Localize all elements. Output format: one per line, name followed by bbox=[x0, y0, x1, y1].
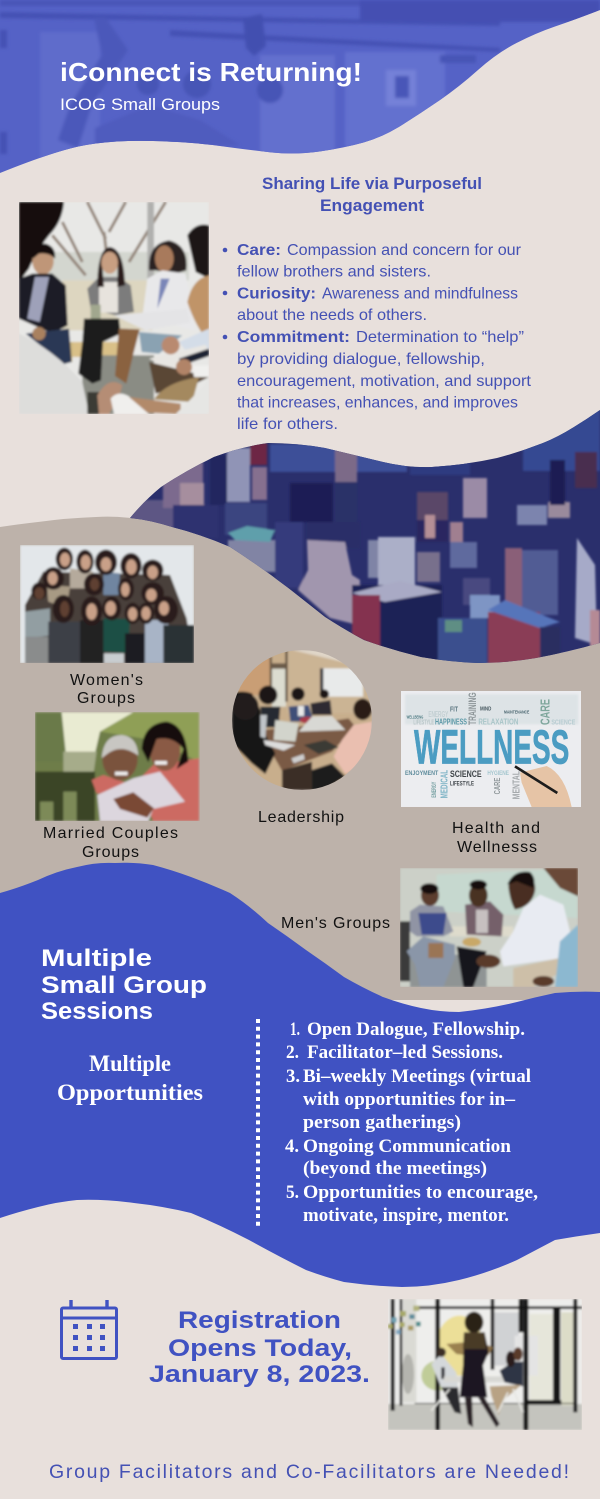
text block: care, curiosity, commitment bullets: Determination to “help” bbox=[356, 329, 524, 346]
text: registration date: Registration bbox=[178, 1307, 341, 1334]
photo: wellness word cloud: TRAINING bbox=[467, 692, 479, 725]
label: women's groups: Groups bbox=[77, 690, 135, 707]
text: registration date: Opens Today, bbox=[168, 1335, 352, 1362]
photo: wellness word cloud: MENTAL bbox=[511, 771, 522, 799]
heading: multiple small group sessions: Sessions bbox=[41, 998, 153, 1025]
photo: wellness word cloud: FIT bbox=[450, 705, 458, 714]
photo: wellness word cloud: CARE bbox=[537, 699, 552, 725]
photo: wellness word cloud bbox=[400, 691, 582, 807]
photo: wellness word cloud: MEDICAL bbox=[439, 770, 450, 798]
photo: wellness word cloud: ENERGY bbox=[432, 782, 438, 798]
label: men's groups: Men's Groups bbox=[281, 915, 390, 932]
numbered list: 5. bbox=[286, 1182, 299, 1203]
numbered list: 4. bbox=[285, 1136, 299, 1157]
label: married couples groups: Groups bbox=[82, 844, 139, 861]
photo: wellness word cloud: RELAXATION bbox=[478, 716, 518, 726]
photo: women's group bbox=[20, 545, 194, 663]
text block: care, curiosity, commitment bullets: Commitment: bbox=[237, 329, 350, 346]
heading: sharing life: Engagement bbox=[320, 197, 425, 215]
label: women's groups bbox=[70, 672, 143, 707]
heading: sharing life: Sharing Life via Purposeful bbox=[262, 175, 482, 193]
numbered list: (beyond the meetings) bbox=[303, 1158, 487, 1179]
text block: care, curiosity, commitment bullets: encouragement, motivation, and support bbox=[237, 373, 532, 390]
label: married couples groups: Married Couples bbox=[43, 825, 178, 842]
photo: wellness word cloud: SCIENCE bbox=[551, 717, 575, 726]
label: married couples groups bbox=[43, 825, 178, 861]
dotted divider bbox=[256, 1019, 260, 1226]
numbered list: motivate, inspire, mentor. bbox=[303, 1205, 509, 1226]
photo: city skyline bbox=[130, 400, 600, 670]
photo: wellness word cloud: WELLBEING bbox=[407, 714, 424, 719]
text block: care, curiosity, commitment bullets: by providing dialogue, fellowship, bbox=[237, 351, 485, 368]
icon: calendar bbox=[60, 1300, 118, 1358]
text block: care, curiosity, commitment bullets: about the needs of others. bbox=[237, 307, 427, 324]
label: health and wellness bbox=[452, 820, 540, 856]
subtitle: ICOG Small Groups bbox=[60, 95, 220, 114]
text block: care, curiosity, commitment bullets: Compassion and concern for our bbox=[287, 242, 522, 259]
photo: wellness word cloud: LIFESTYLE bbox=[450, 781, 474, 788]
label: leadership: Leadership bbox=[258, 809, 344, 826]
text: registration date: January 8, 2023. bbox=[149, 1361, 370, 1388]
numbered list: Facilitator–led Sessions. bbox=[307, 1042, 503, 1063]
photo: wellness word cloud: CARE bbox=[493, 777, 502, 794]
heading: sharing life bbox=[262, 175, 482, 215]
photo: men's group bbox=[400, 868, 578, 987]
label: women's groups: Women's bbox=[70, 672, 143, 689]
numbered list: 3. bbox=[286, 1066, 300, 1087]
photo: group discussion circle bbox=[19, 202, 209, 414]
photo: leadership meeting in circle bbox=[232, 650, 372, 790]
panel: blue small group sessions bbox=[0, 863, 600, 1287]
photo: wellness word cloud: HAPPINESS bbox=[435, 716, 467, 726]
label: health and wellness: Wellnesss bbox=[457, 839, 537, 856]
numbered list: with opportunities for in– bbox=[303, 1089, 515, 1110]
heading: multiple small group sessions: Multiple bbox=[41, 945, 152, 972]
text block: care, curiosity, commitment bullets: Curiosity: bbox=[237, 286, 316, 302]
numbered list: 2. bbox=[286, 1042, 299, 1063]
title: iConnect is Returning! bbox=[60, 57, 362, 87]
text: multiple opportunities: Multiple bbox=[89, 1051, 171, 1076]
photo: wellness word cloud: LIFESTYLE bbox=[413, 717, 434, 726]
photo: wellness word cloud: MAINTENANCE bbox=[504, 710, 529, 715]
icon: hand with pen bbox=[515, 766, 572, 807]
numbered list: 1. bbox=[290, 1019, 300, 1040]
photo: married couple bbox=[35, 712, 199, 821]
text: multiple opportunities: Opportunities bbox=[57, 1080, 203, 1105]
text block: care, curiosity, commitment bullets: fellow brothers and sisters. bbox=[237, 264, 431, 280]
footer callout: facilitators needed: Group Facilitators and Co-Facilitators are Needed! bbox=[49, 1461, 569, 1483]
heading: multiple small group sessions bbox=[41, 945, 207, 1025]
numbered list: Bi–weekly Meetings (virtual bbox=[303, 1066, 531, 1087]
text block: care, curiosity, commitment bullets: Care: bbox=[237, 242, 281, 259]
photo: wellness word cloud: MIND bbox=[480, 706, 491, 712]
numbered list: Open Dalogue, Fellowship. bbox=[307, 1019, 525, 1040]
text block: care, curiosity, commitment bullets: that increases, enhances, and improves bbox=[237, 394, 518, 412]
panel: taupe groups section bbox=[0, 517, 600, 1000]
photo: wellness word cloud: ENERGY bbox=[428, 710, 449, 719]
text block: care, curiosity, commitment bullets bbox=[223, 242, 532, 433]
photo: wellness word cloud: SCIENCE bbox=[450, 769, 482, 779]
numbered list: person gatherings) bbox=[303, 1112, 461, 1133]
numbered list: Opportunities to encourage, bbox=[303, 1182, 538, 1203]
label: health and wellness: Health and bbox=[452, 820, 540, 837]
panel: header banner with stage photo bbox=[0, 0, 600, 180]
text block: care, curiosity, commitment bullets: life for others. bbox=[237, 416, 338, 433]
numbered list: Ongoing Communication bbox=[303, 1136, 511, 1157]
photo: wellness word cloud: HYGIENE bbox=[487, 771, 509, 777]
heading: multiple small group sessions: Small Group bbox=[41, 972, 207, 999]
photo: woman presenting in glass office bbox=[388, 1299, 582, 1430]
text: registration date bbox=[149, 1307, 370, 1388]
text block: care, curiosity, commitment bullets: Awareness and mindfulness bbox=[322, 286, 518, 302]
text: multiple opportunities bbox=[57, 1051, 203, 1105]
photo: wellness word cloud: ENJOYMENT bbox=[405, 770, 438, 777]
numbered list bbox=[285, 1019, 538, 1226]
